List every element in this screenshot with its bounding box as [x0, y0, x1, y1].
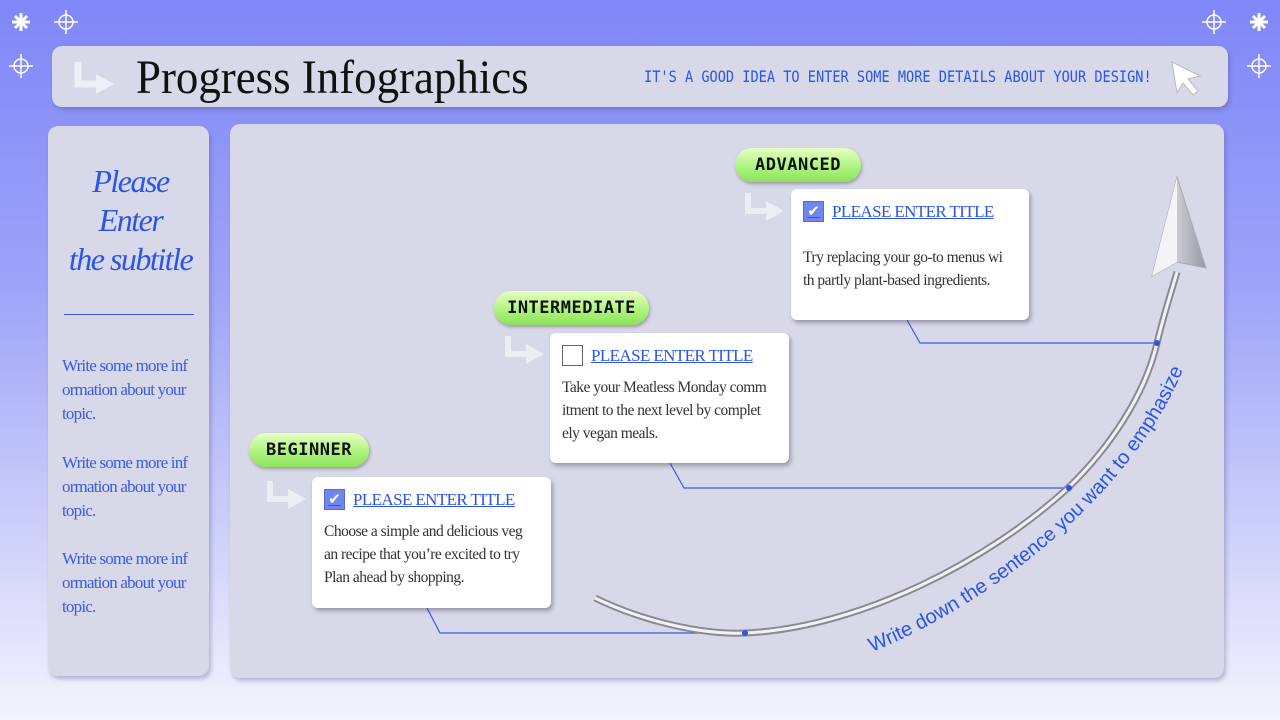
chart: progress curve: Write down the sentence you want to emphasize	[866, 367, 1182, 650]
pill: intermediate: INTERMEDIATE	[507, 298, 636, 318]
side text 2: topic.	[62, 501, 95, 520]
header bar	[52, 46, 1228, 107]
side text 2: ormation about your	[62, 477, 186, 496]
subtitle: Enter	[99, 202, 162, 238]
card: beginner: Plan ahead by shopping.	[324, 569, 464, 586]
pill: beginner: BEGINNER	[266, 440, 352, 460]
card: beginner: an recipe that you’re excited to try	[324, 546, 519, 563]
icon: header arrow	[74, 62, 114, 94]
pill: advanced: ADVANCED	[755, 155, 841, 175]
icon: cursor	[1172, 61, 1202, 96]
card: advanced	[791, 189, 1029, 320]
side text 2: Write some more inf	[62, 453, 187, 472]
card: intermediate: itment to the next level by complet	[562, 402, 761, 419]
card: intermediate: PLEASE ENTER TITLE	[591, 346, 753, 364]
side text 3: Write some more inf	[62, 549, 187, 568]
pill: beginner	[249, 433, 369, 467]
card: advanced: th partly plant-based ingredients.	[803, 272, 990, 289]
card: intermediate: Take your Meatless Monday comm	[562, 379, 766, 396]
side text 1: ormation about your	[62, 380, 186, 399]
card: advanced: ✔	[807, 202, 820, 220]
card: advanced: PLEASE ENTER TITLE	[832, 202, 994, 220]
panel: sidebar	[48, 126, 209, 676]
subtitle: Please	[92, 163, 169, 199]
side text 3	[62, 549, 188, 616]
card: beginner: ✔	[328, 490, 341, 508]
side text 1	[62, 356, 188, 423]
side text 1: Write some more inf	[62, 356, 187, 375]
header note: IT'S A GOOD IDEA TO ENTER SOME MORE DETAILS ABOUT YOUR DESIGN!	[644, 67, 1152, 86]
pill: intermediate	[494, 291, 649, 325]
pill: advanced	[735, 148, 861, 182]
card: intermediate	[550, 333, 789, 463]
card: advanced: Try replacing your go-to menus wi	[803, 249, 1002, 266]
side text 1: topic.	[62, 404, 95, 423]
panel: main	[230, 124, 1224, 678]
card: beginner: Choose a simple and delicious veg	[324, 523, 522, 540]
side text 3: ormation about your	[62, 573, 186, 592]
card: beginner	[312, 477, 551, 608]
side text 3: topic.	[62, 597, 95, 616]
subtitle	[69, 163, 193, 277]
title: Progress Infographics	[136, 51, 529, 104]
card: beginner: PLEASE ENTER TITLE	[353, 490, 515, 508]
card: intermediate: ely vegan meals.	[562, 425, 658, 442]
side text 2	[62, 453, 188, 520]
subtitle: the subtitle	[69, 241, 192, 277]
